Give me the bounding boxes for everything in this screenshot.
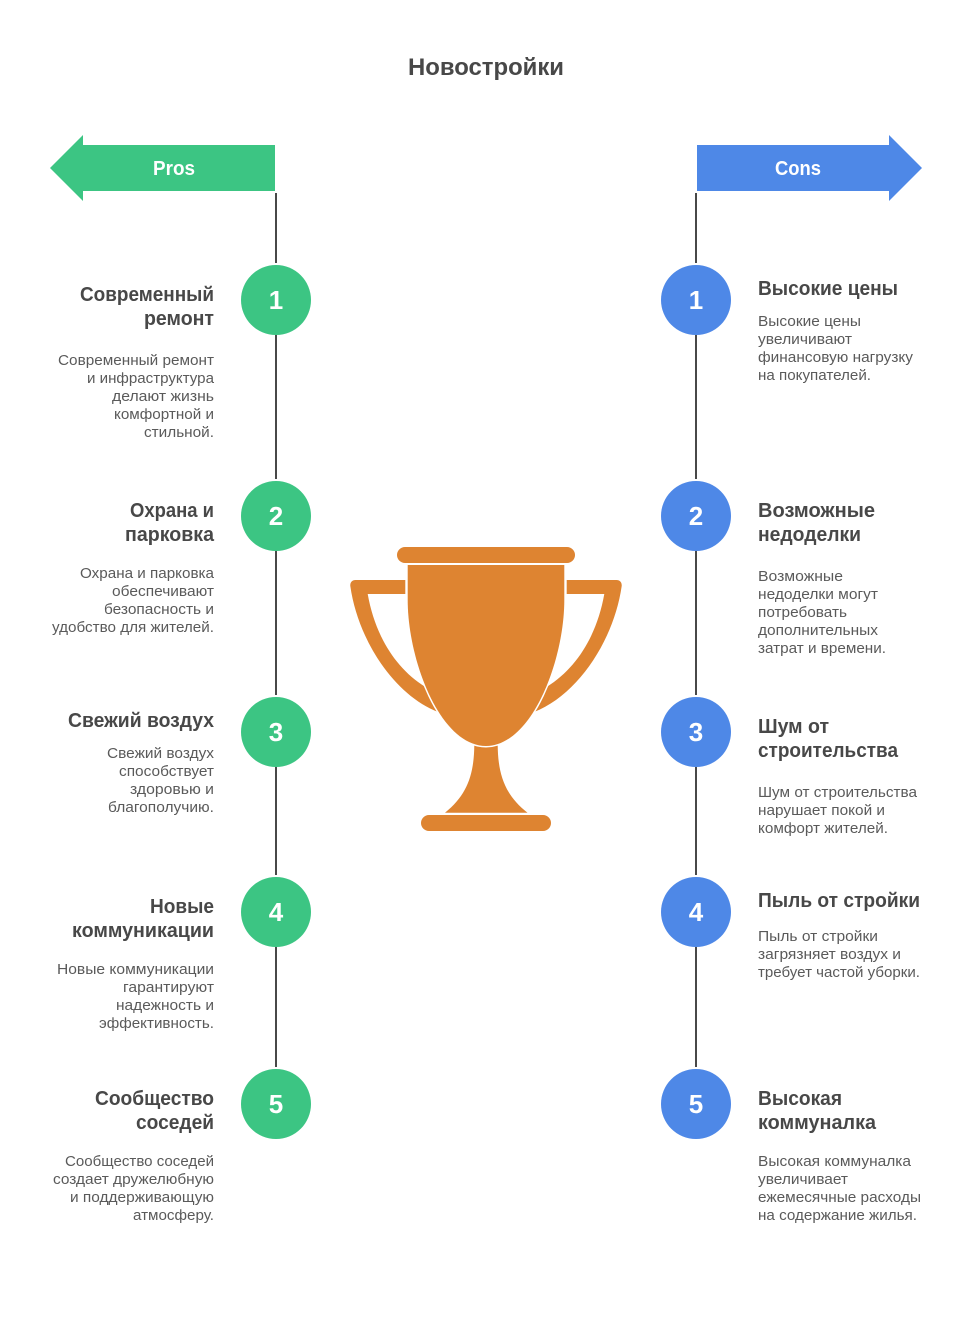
con 3: Шум от строительства: Шум от строительства bbox=[758, 784, 918, 801]
pro 3: Свежий воздух: 3 bbox=[269, 717, 283, 747]
con 5: Высокая коммуналка: коммуналка bbox=[758, 1112, 877, 1134]
pro 5: Сообщество соседей bbox=[53, 1069, 311, 1224]
pro 1: Современный ремонт: Современный bbox=[80, 284, 214, 306]
title: Новостройки bbox=[408, 54, 564, 81]
pro 3: Свежий воздух: здоровью и bbox=[130, 781, 214, 798]
con 2: Возможные недоделки: Возможные bbox=[758, 568, 843, 585]
con 5: Высокая коммуналка: Высокая коммуналка bbox=[758, 1153, 912, 1170]
pro 5: Сообщество соседей: создает дружелюбную bbox=[53, 1171, 214, 1188]
con 2: Возможные недоделки: недоделки bbox=[758, 524, 861, 546]
pro 4: Новые коммуникации: Новые bbox=[150, 896, 214, 918]
icon: trophy bbox=[350, 547, 622, 831]
pro 1: Современный ремонт bbox=[58, 265, 311, 441]
timeline: cons bbox=[695, 193, 697, 1067]
con 3: Шум от строительства: комфорт жителей. bbox=[758, 820, 888, 837]
con 1: Высокие цены: Высокие цены bbox=[758, 278, 898, 300]
con 2: Возможные недоделки bbox=[661, 481, 886, 657]
pro 2: Охрана и парковка: 2 bbox=[269, 501, 283, 531]
pro 2: Охрана и парковка: обеспечивают bbox=[112, 583, 214, 600]
pro 3: Свежий воздух: благополучию. bbox=[108, 799, 214, 816]
con 3: Шум от строительства: нарушает покой и bbox=[758, 802, 885, 819]
pro 4: Новые коммуникации bbox=[57, 877, 311, 1032]
arrow: Cons bbox=[697, 135, 922, 201]
con 3: Шум от строительства: Шум от bbox=[758, 716, 829, 738]
con 4: Пыль от стройки: требует частой уборки. bbox=[758, 964, 920, 981]
pro 3: Свежий воздух: Свежий воздух bbox=[68, 710, 214, 732]
con 2: Возможные недоделки: 2 bbox=[689, 501, 703, 531]
pro 1: Современный ремонт: комфортной и bbox=[114, 406, 214, 423]
pro 4: Новые коммуникации: коммуникации bbox=[72, 920, 214, 942]
con 5: Высокая коммуналка: на содержание жилья. bbox=[758, 1207, 917, 1224]
pro 1: Современный ремонт: делают жизнь bbox=[112, 388, 214, 405]
pro 3: Свежий воздух bbox=[68, 697, 311, 816]
pro 4: Новые коммуникации: гарантируют bbox=[123, 979, 214, 996]
pro 4: Новые коммуникации: 4 bbox=[269, 897, 284, 927]
pro 5: Сообщество соседей: и поддерживающую bbox=[70, 1189, 214, 1206]
pro 2: Охрана и парковка: удобство для жителей. bbox=[52, 619, 214, 636]
pro 2: Охрана и парковка: парковка bbox=[125, 524, 215, 546]
pro 2: Охрана и парковка: Охрана и парковка bbox=[80, 565, 215, 582]
pro 2: Охрана и парковка bbox=[52, 481, 311, 636]
con 4: Пыль от стройки: загрязняет воздух и bbox=[758, 946, 901, 963]
pro 5: Сообщество соседей: соседей bbox=[136, 1112, 214, 1134]
con 5: Высокая коммуналка: 5 bbox=[689, 1089, 703, 1119]
arrow: Cons: Cons bbox=[775, 158, 821, 180]
con 2: Возможные недоделки: потребовать bbox=[758, 604, 847, 621]
con 5: Высокая коммуналка bbox=[661, 1069, 921, 1224]
con 4: Пыль от стройки: Пыль от стройки bbox=[758, 928, 878, 945]
con 3: Шум от строительства bbox=[661, 697, 918, 837]
arrow: Pros: Pros bbox=[153, 158, 195, 180]
con 2: Возможные недоделки: Возможные bbox=[758, 500, 875, 522]
con 4: Пыль от стройки: Пыль от стройки bbox=[758, 890, 920, 912]
timeline: pros bbox=[275, 193, 277, 1067]
pro 4: Новые коммуникации: Новые коммуникации bbox=[57, 961, 214, 978]
pro 4: Новые коммуникации: эффективность. bbox=[99, 1015, 214, 1032]
pro 3: Свежий воздух: Свежий воздух bbox=[107, 745, 215, 762]
pro 3: Свежий воздух: способствует bbox=[119, 763, 214, 780]
con 1: Высокие цены: Высокие цены bbox=[758, 313, 861, 330]
pro 5: Сообщество соседей: атмосферу. bbox=[133, 1207, 214, 1224]
pro 2: Охрана и парковка: Охрана и bbox=[130, 500, 214, 522]
con 5: Высокая коммуналка: Высокая bbox=[758, 1088, 842, 1110]
arrow: Pros bbox=[50, 135, 275, 201]
pro 1: Современный ремонт: 1 bbox=[269, 285, 283, 315]
con 1: Высокие цены: увеличивают bbox=[758, 331, 852, 348]
con 2: Возможные недоделки: дополнительных bbox=[758, 622, 879, 639]
con 1: Высокие цены: на покупателей. bbox=[758, 367, 871, 384]
pro 1: Современный ремонт: стильной. bbox=[144, 424, 214, 441]
con 3: Шум от строительства: 3 bbox=[689, 717, 703, 747]
pro 5: Сообщество соседей: Сообщество соседей bbox=[65, 1153, 214, 1170]
con 5: Высокая коммуналка: ежемесячные расходы bbox=[758, 1189, 921, 1206]
con 2: Возможные недоделки: затрат и времени. bbox=[758, 640, 886, 657]
con 5: Высокая коммуналка: увеличивает bbox=[758, 1171, 848, 1188]
pro 5: Сообщество соседей: Сообщество bbox=[95, 1088, 214, 1110]
con 3: Шум от строительства: строительства bbox=[758, 740, 899, 762]
con 1: Высокие цены: 1 bbox=[689, 285, 703, 315]
pro 5: Сообщество соседей: 5 bbox=[269, 1089, 283, 1119]
con 1: Высокие цены: финансовую нагрузку bbox=[758, 349, 914, 366]
con 4: Пыль от стройки bbox=[661, 877, 920, 981]
pro 2: Охрана и парковка: безопасность и bbox=[104, 601, 214, 618]
pro 1: Современный ремонт: и инфраструктура bbox=[87, 370, 215, 387]
con 1: Высокие цены bbox=[661, 265, 914, 384]
con 2: Возможные недоделки: недоделки могут bbox=[758, 586, 878, 603]
pro 4: Новые коммуникации: надежность и bbox=[116, 997, 214, 1014]
pro 1: Современный ремонт: ремонт bbox=[144, 308, 214, 330]
con 4: Пыль от стройки: 4 bbox=[689, 897, 704, 927]
pro 1: Современный ремонт: Современный ремонт bbox=[58, 352, 214, 369]
